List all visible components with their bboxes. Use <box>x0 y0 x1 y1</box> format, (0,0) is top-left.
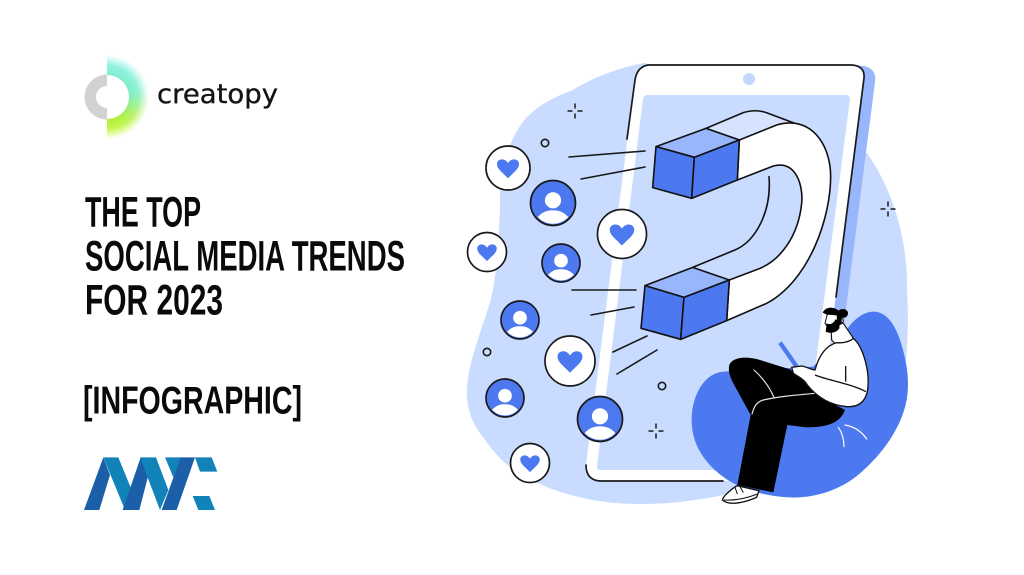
motion lines <box>569 151 657 374</box>
shirt and arm <box>792 338 868 407</box>
title: THE TOP <box>85 190 201 237</box>
bubble: heart 4 <box>545 336 595 386</box>
arm lines <box>815 366 866 392</box>
beanbag creases <box>838 425 867 447</box>
logo: creatopy <box>84 55 278 139</box>
magnet: top band <box>706 111 795 140</box>
neck <box>831 323 854 345</box>
sparkles <box>568 104 896 438</box>
bubble: avatar 2 <box>542 244 580 282</box>
bubble: heart 1 <box>486 146 530 190</box>
trouser seams <box>752 370 816 414</box>
icon: creatopy ring <box>84 55 149 139</box>
magnet: inner curve <box>693 177 769 267</box>
bubble: avatar 5 <box>578 396 622 442</box>
icon: magnet <box>641 111 831 339</box>
small rings <box>483 139 666 390</box>
bubble: avatar 1 <box>530 180 576 226</box>
title <box>85 190 405 324</box>
beanbag <box>692 312 908 497</box>
bubble: avatar 3 <box>501 301 539 339</box>
title: FOR 2023 <box>85 277 223 324</box>
phone: screen <box>597 95 850 470</box>
bubble: heart 5 <box>510 444 550 482</box>
wordmark: creatopy: creatopy <box>157 79 278 110</box>
logo: MTC <box>84 457 217 510</box>
phone: outline <box>586 65 864 481</box>
background blob <box>467 63 908 504</box>
magnet: upper pole <box>653 128 739 198</box>
phone: camera dot <box>743 73 755 85</box>
tablet <box>780 343 797 367</box>
magnet: lower pole <box>641 267 729 339</box>
bubble: avatar 4 <box>486 379 524 417</box>
bubble: heart 3 <box>468 232 506 272</box>
shoe <box>722 486 759 503</box>
phone: side shadow <box>825 65 875 340</box>
subtitle: infographic tag: [INFOGRAPHIC] <box>83 379 302 422</box>
figure: man on beanbag <box>692 308 908 503</box>
head <box>823 308 848 333</box>
phone: body <box>586 65 864 481</box>
magnet: curved body <box>727 123 831 321</box>
trousers <box>729 358 845 492</box>
bubble: heart 2 <box>598 210 646 258</box>
title: SOCIAL MEDIA TRENDS <box>85 233 405 280</box>
illustration: magnet attracting social media <box>467 63 908 504</box>
